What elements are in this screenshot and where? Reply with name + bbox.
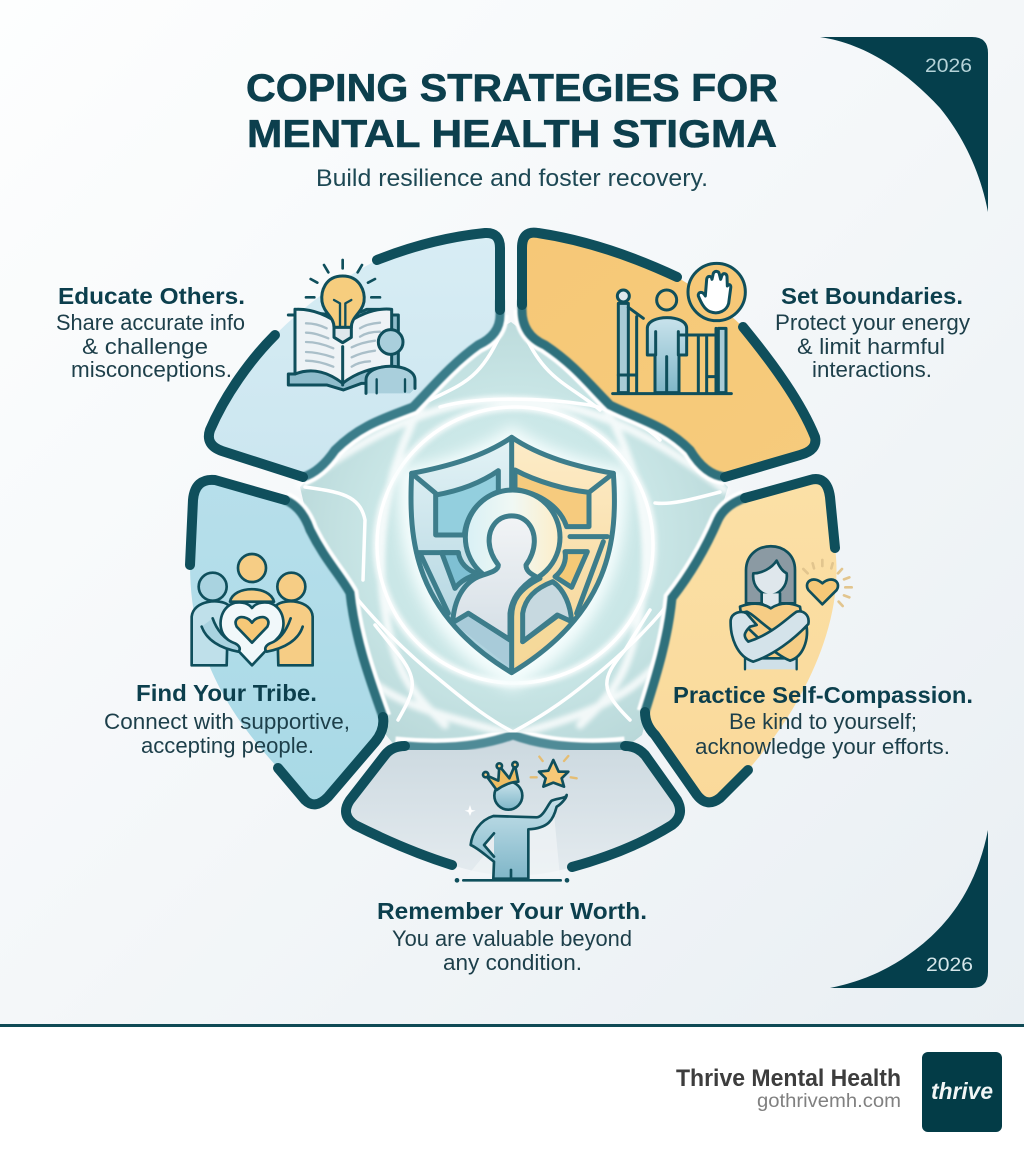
shield halves — [411, 437, 512, 673]
icon: person, gate and stop hand — [613, 263, 745, 394]
icon: crowned figure holding a star — [456, 756, 577, 881]
person silhouette — [453, 516, 536, 640]
corner accent bottom right: 2026 — [926, 955, 973, 976]
text: remember your worth: any condition. — [443, 950, 582, 975]
text: set boundaries: interactions. — [812, 357, 932, 382]
subtitle: Build resilience and foster recovery. — [316, 165, 708, 192]
text: set boundaries — [775, 283, 970, 382]
title: MENTAL HEALTH STIGMA — [247, 113, 777, 156]
footer band — [0, 1024, 1024, 1154]
text: educate others: Educate Others. — [58, 283, 245, 309]
text: educate others: Share accurate info — [56, 310, 245, 335]
footer logo — [922, 1052, 1002, 1132]
text: educate others — [56, 283, 245, 382]
text: find your tribe — [104, 680, 350, 758]
footer brand text — [676, 1065, 901, 1112]
text: educate others: misconceptions. — [71, 357, 232, 382]
text: set boundaries: Set Boundaries. — [781, 283, 963, 309]
text: remember your worth — [377, 898, 647, 975]
halo ring — [465, 490, 560, 585]
footer logo: thrive — [931, 1078, 993, 1104]
panel: educate others — [209, 233, 500, 477]
panel: set boundaries — [522, 233, 815, 477]
text: remember your worth: You are valuable beyond — [392, 926, 632, 951]
panel: find your tribe — [190, 480, 383, 804]
frame lines — [412, 437, 613, 613]
shield outline — [411, 437, 614, 673]
corner accent top right — [820, 37, 988, 212]
icon: three people around a heart — [192, 554, 313, 665]
text: educate others: & challenge — [82, 334, 208, 359]
icon: woman hugging herself with heart — [731, 546, 852, 669]
text: remember your worth: Remember Your Worth. — [377, 898, 647, 924]
corner accent top right: 2026 — [925, 56, 972, 77]
text: find your tribe: Find Your Tribe. — [136, 680, 317, 706]
central shield emblem — [398, 425, 628, 690]
text: practice self-compassion: Be kind to yourself; — [729, 709, 917, 734]
central hub with glowing lines — [300, 322, 728, 752]
text: practice self-compassion: acknowledge your efforts. — [695, 734, 950, 759]
panel: remember your worth — [346, 735, 680, 881]
text: set boundaries: & limit harmful — [797, 334, 945, 359]
text: practice self-compassion: Practice Self-Compassion. — [673, 682, 973, 708]
icon: book, bulb and person — [288, 260, 415, 393]
text: find your tribe: Connect with supportive, — [104, 709, 350, 734]
title: COPING STRATEGIES FOR — [246, 67, 778, 110]
footer brand text: gothrivemh.com — [757, 1091, 901, 1112]
text: find your tribe: accepting people. — [141, 733, 314, 758]
title — [246, 67, 778, 156]
panel: practice self-compassion — [645, 479, 852, 802]
text: set boundaries: Protect your energy — [775, 310, 970, 335]
inner coloured panels — [436, 471, 498, 535]
corner accent bottom right — [830, 830, 988, 988]
text: practice self-compassion — [673, 682, 973, 759]
footer brand text: Thrive Mental Health — [676, 1065, 901, 1092]
lower panels — [453, 613, 509, 667]
